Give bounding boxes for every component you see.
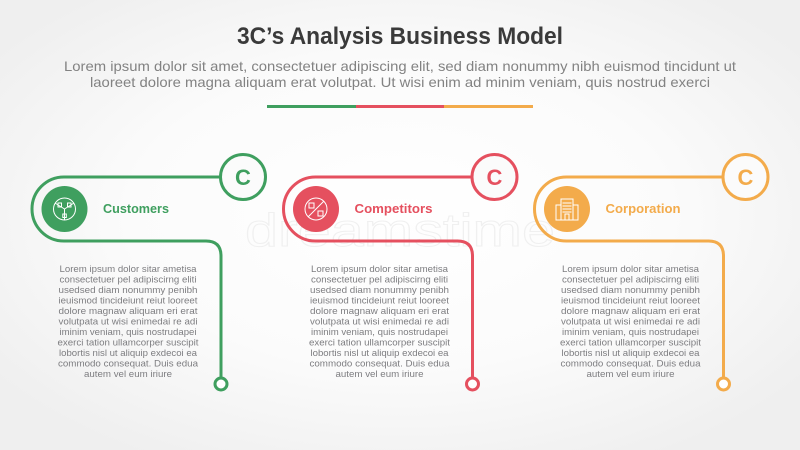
body text: autem vel eum iriure	[84, 369, 172, 379]
C badge	[723, 154, 768, 200]
label: Competitors	[354, 201, 432, 216]
body text: exerci tation ullamcorper suscipit	[309, 338, 450, 348]
subtitle text: laoreet dolore magna aliquam erat volutpat. Ut wisi enim ad minim veniam, quis nostrud exerci	[90, 74, 710, 90]
body text: iminim veniam, quis nostrudapei	[311, 327, 448, 337]
subtitle text	[64, 58, 736, 90]
body text: autem vel eum iriure	[586, 369, 674, 379]
body text: usedsed diam nonummy penibh	[561, 285, 700, 295]
label: Customers	[103, 201, 169, 216]
body text: volutpata ut wisi enimedai re adi	[561, 316, 700, 326]
C badge	[472, 154, 517, 200]
body text: lobortis nisl ut aliquip exdecoi ea	[562, 348, 700, 358]
body text: commodo consequat. Duis edua	[58, 358, 199, 368]
C badge: C	[235, 165, 251, 190]
body text: Lorem ipsum dolor sitar ametisa	[562, 264, 700, 274]
panel: competitors	[284, 154, 517, 390]
body text: exerci tation ullamcorper suscipit	[58, 338, 199, 348]
body text: lobortis nisl ut aliquip exdecoi ea	[59, 348, 198, 358]
C badge	[220, 154, 266, 200]
icon: customer segments	[42, 186, 88, 232]
body text: exerci tation ullamcorper suscipit	[560, 338, 701, 348]
icon: office building	[544, 186, 590, 232]
body text: iminim veniam, quis nostrudapei	[562, 327, 699, 337]
body text: commodo consequat. Duis edua	[560, 358, 701, 368]
body text: ieuismod tincideiunt reiut looreet	[58, 296, 198, 306]
C badge: C	[738, 165, 754, 190]
end dot	[215, 378, 227, 390]
body text: usedsed diam nonummy penibh	[58, 285, 198, 295]
body text: iminim veniam, quis nostrudapei	[60, 327, 196, 337]
end dot	[718, 378, 730, 390]
connector line	[32, 177, 221, 378]
text: dreamstime	[245, 204, 555, 256]
subtitle text: Lorem ipsum dolor sit amet, consectetuer adipiscing elit, sed diam nonummy nibh euismod tincidunt ut	[64, 58, 736, 74]
body text: dolore magnaw aliquam eri erat	[58, 306, 198, 316]
body text: consectetuer pel adipiscirng eliti	[562, 274, 699, 284]
body text: dolore magnaw aliquam eri erat	[561, 306, 700, 316]
connector line	[534, 177, 724, 378]
connector line	[284, 177, 472, 378]
body text: volutpata ut wisi enimedai re adi	[310, 316, 449, 326]
body text: ieuismod tincideiunt reiut looreet	[561, 296, 700, 306]
tri-colour divider	[267, 105, 533, 108]
body text: consectetuer pel adipiscirng eliti	[311, 274, 448, 284]
body text: commodo consequat. Duis edua	[310, 358, 450, 368]
body text: Lorem ipsum dolor sitar ametisa	[311, 264, 449, 274]
end dot	[466, 378, 478, 390]
body text: ieuismod tincideiunt reiut looreet	[310, 296, 449, 306]
body text	[58, 264, 199, 379]
body text	[309, 264, 450, 379]
body text	[560, 264, 701, 379]
body text: volutpata ut wisi enimedai re adi	[58, 316, 198, 326]
body text: Lorem ipsum dolor sitar ametisa	[60, 264, 197, 274]
panel: customers	[32, 154, 266, 390]
body text: usedsed diam nonummy penibh	[310, 285, 449, 295]
label: Corporation	[606, 201, 681, 216]
body text: autem vel eum iriure	[336, 369, 424, 379]
panel: corporation	[534, 154, 768, 390]
C badge: C	[487, 165, 503, 190]
title: 3C’s Analysis Business Model	[237, 23, 563, 50]
body text: consectetuer pel adipiscirng eliti	[60, 274, 196, 284]
icon: price competition	[293, 186, 339, 232]
body text: lobortis nisl ut aliquip exdecoi ea	[310, 348, 449, 358]
body text: dolore magnaw aliquam eri erat	[310, 306, 449, 316]
